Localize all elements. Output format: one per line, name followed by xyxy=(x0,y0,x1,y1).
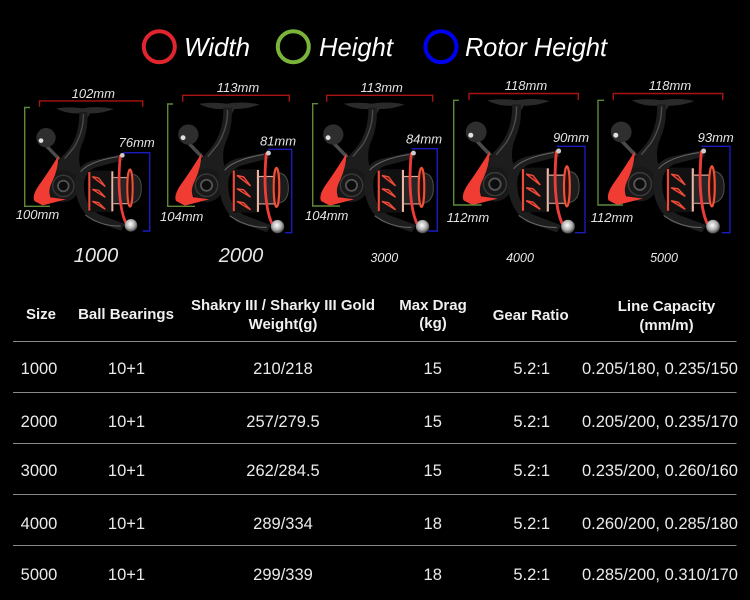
table row 4000: 289/334 xyxy=(253,515,313,533)
table header: Weight(g) xyxy=(249,316,317,333)
table row 2000: 257/279.5 xyxy=(246,413,320,431)
legend: rotor height: Rotor Height xyxy=(465,32,609,62)
reel diagram: size 5000 xyxy=(591,78,734,265)
rotor height bracket 81mm xyxy=(260,134,296,233)
height bracket 112mm xyxy=(447,100,489,225)
reel diagram: size 3000 xyxy=(305,80,442,265)
size label 1000: 1000 xyxy=(74,245,118,267)
table row 1000: 15 xyxy=(424,360,442,378)
rotor height bracket 84mm: 84mm xyxy=(406,132,442,146)
width bracket 118mm xyxy=(469,78,578,100)
width bracket 118mm: 118mm xyxy=(649,78,691,93)
table row 2000: 10+1 xyxy=(108,413,145,431)
table row 2000: 5.2:1 xyxy=(513,413,550,431)
rotor height bracket 81mm: 81mm xyxy=(260,134,296,149)
width bracket 102mm xyxy=(40,86,143,107)
width bracket 113mm xyxy=(327,80,433,102)
table row 5000: 5000 xyxy=(21,566,57,584)
table row 3000: 3000 xyxy=(21,462,57,480)
table row 2000: 2000 xyxy=(21,413,57,431)
rotor height bracket 76mm xyxy=(119,135,155,231)
table row 3000: 15 xyxy=(424,462,442,480)
rotor height bracket 90mm xyxy=(553,130,589,233)
table row 3000: 262/284.5 xyxy=(246,462,320,480)
table header: Size xyxy=(26,306,56,323)
table row 5000: 18 xyxy=(424,566,442,584)
table row 1000: 0.205/180, 0.235/150 xyxy=(582,360,738,378)
table row 3000: 5.2:1 xyxy=(513,462,550,480)
width bracket 113mm: 113mm xyxy=(361,80,403,95)
icon: reel 5000 xyxy=(608,99,724,233)
height bracket 112mm: 112mm xyxy=(447,210,489,225)
width bracket 113mm: 113mm xyxy=(217,80,259,95)
width bracket 118mm xyxy=(613,78,723,100)
table row 2000: 0.205/200, 0.235/170 xyxy=(582,413,738,431)
table row 1000: 210/218 xyxy=(253,360,313,378)
reel diagram: size 1000 xyxy=(16,86,155,267)
icon: reel 3000 xyxy=(320,103,433,233)
rotor height bracket 93mm xyxy=(698,130,734,233)
table row 1000 xyxy=(21,360,738,378)
height bracket 100mm xyxy=(16,108,59,222)
legend: height: Height xyxy=(319,32,395,62)
table row 2000 xyxy=(21,413,738,431)
rotor height bracket 93mm: 93mm xyxy=(698,130,734,145)
table header: (mm/m) xyxy=(639,317,694,334)
table row 4000: 0.260/200, 0.285/180 xyxy=(582,515,738,533)
rotor height bracket 84mm xyxy=(406,132,442,231)
table row 2000: 15 xyxy=(424,413,442,431)
height bracket 112mm xyxy=(591,100,633,225)
legend: width: Width xyxy=(184,32,250,62)
legend: width xyxy=(144,31,250,62)
reel diagram: size 2000 xyxy=(160,80,296,267)
table header: (kg) xyxy=(419,315,447,332)
width bracket 102mm: 102mm xyxy=(72,86,115,101)
table row 5000: 0.285/200, 0.310/170 xyxy=(582,566,738,584)
size label 2000: 2000 xyxy=(218,245,263,267)
table row 3000 xyxy=(21,462,738,480)
table header xyxy=(26,297,716,334)
width bracket 118mm: 118mm xyxy=(505,78,547,93)
table row 3000: 0.235/200, 0.260/160 xyxy=(582,462,738,480)
table row 1000: 5.2:1 xyxy=(513,360,550,378)
icon: reel 2000 xyxy=(175,103,288,233)
table row 3000: 10+1 xyxy=(108,462,145,480)
table row 5000 xyxy=(21,566,738,584)
reel diagram: size 4000 xyxy=(447,78,589,265)
table header: Gear Ratio xyxy=(493,307,569,324)
specification table xyxy=(13,297,738,584)
table row 4000: 4000 xyxy=(21,515,57,533)
rotor height bracket 90mm: 90mm xyxy=(553,130,589,145)
height bracket 100mm: 100mm xyxy=(16,207,59,222)
size label 3000: 3000 xyxy=(370,251,398,265)
table row 4000 xyxy=(21,515,738,533)
table row 5000: 5.2:1 xyxy=(513,566,550,584)
size label 4000: 4000 xyxy=(506,251,534,265)
table row 5000: 299/339 xyxy=(253,566,313,584)
table row 1000: 1000 xyxy=(21,360,57,378)
legend: height xyxy=(278,31,395,62)
height bracket 112mm: 112mm xyxy=(591,210,633,225)
table header: Max Drag xyxy=(399,297,467,314)
table row 4000: 5.2:1 xyxy=(513,515,550,533)
size label 5000: 5000 xyxy=(650,251,678,265)
table header: Line Capacity xyxy=(618,298,716,315)
icon: reel 4000 xyxy=(463,99,579,233)
table row 1000: 10+1 xyxy=(108,360,145,378)
table row 4000: 10+1 xyxy=(108,515,145,533)
rotor height bracket 76mm: 76mm xyxy=(119,135,155,150)
table header: Ball Bearings xyxy=(78,306,174,323)
legend xyxy=(144,31,609,62)
height bracket 104mm: 104mm xyxy=(305,208,349,223)
icon: reel 1000 xyxy=(34,107,141,232)
height bracket 104mm xyxy=(305,104,349,223)
table row 4000: 18 xyxy=(424,515,442,533)
table row 5000: 10+1 xyxy=(108,566,145,584)
height bracket 104mm: 104mm xyxy=(160,209,204,224)
width bracket 113mm xyxy=(183,80,289,102)
height bracket 104mm xyxy=(160,104,204,224)
table header: Shakry III / Sharky III Gold xyxy=(191,297,375,314)
